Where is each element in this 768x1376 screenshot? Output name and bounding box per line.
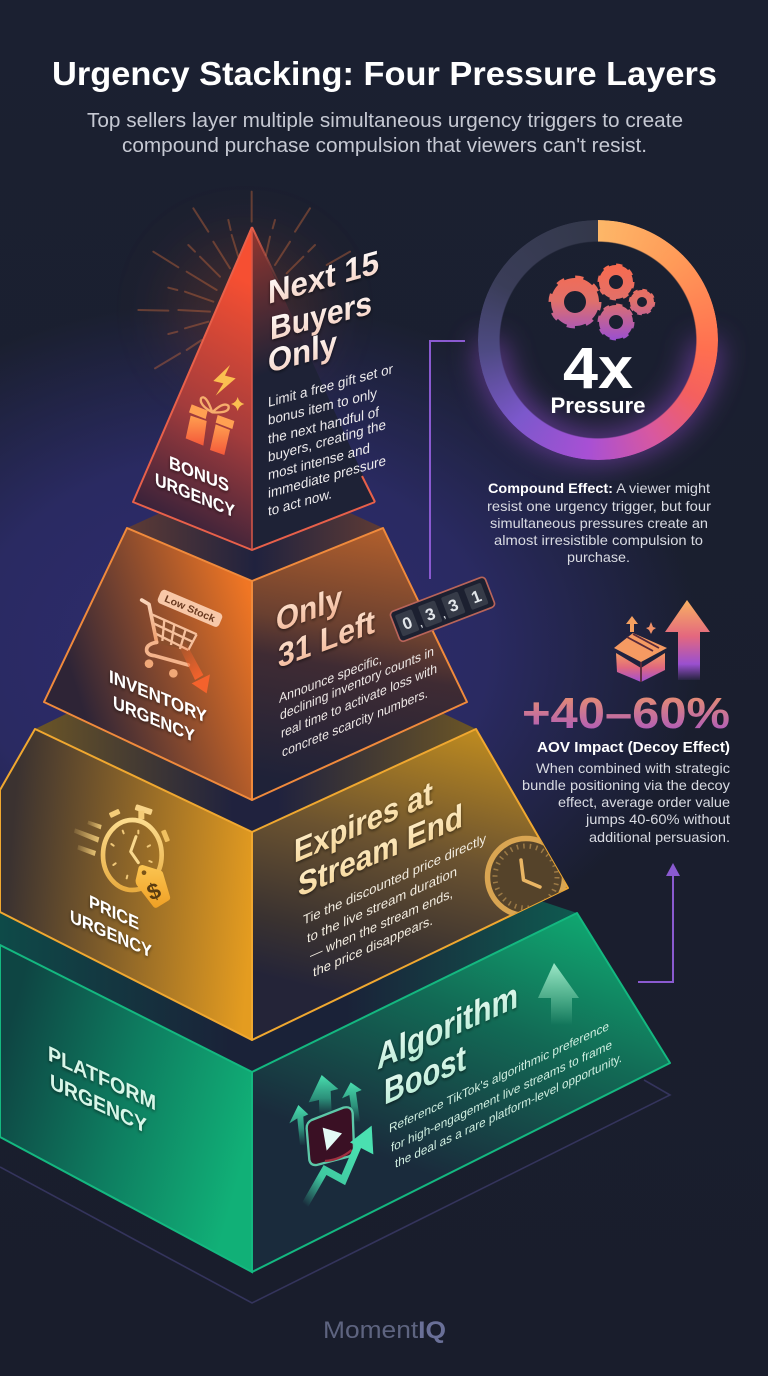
counter: 0,3,3,1 <box>389 576 496 642</box>
icon: stopwatch with price tag: $ <box>143 876 165 905</box>
right face: inventory <box>252 528 467 800</box>
body: only 31 left: concrete scarcity numbers. <box>282 685 428 760</box>
right face: platform <box>252 913 670 1272</box>
body: next 15 buyers only: the next handful of <box>268 404 379 448</box>
text block: compound effect: purchase. <box>567 549 630 565</box>
heading: next 15 buyers only: Buyers <box>270 285 372 348</box>
icon: clock on price layer <box>488 838 564 916</box>
text block: aov impact: additional persuasion. <box>589 829 730 845</box>
icon: box with up arrow <box>614 600 710 682</box>
heading: expires at stream end: Stream End <box>298 797 463 905</box>
subtitle: compound purchase compulsion that viewers can't resist. <box>122 135 647 157</box>
text block: compound effect: resist one urgency trigger, but four <box>487 498 711 514</box>
text block: aov impact: effect, average order value <box>558 794 730 810</box>
counter: 0,3,3,1: 0 <box>400 613 415 634</box>
right face: price <box>252 729 568 1040</box>
footer logo: Moment IQ <box>323 1317 446 1344</box>
panel: platform urgency layer <box>0 900 670 1272</box>
connector: pressure ring to inventory layer <box>430 341 465 579</box>
left face: price <box>0 729 252 1040</box>
text block: compound effect <box>487 480 711 565</box>
body: only 31 left <box>279 643 437 760</box>
body: next 15 buyers only <box>268 361 393 520</box>
heading: next 15 buyers only: Only <box>268 325 337 381</box>
heading: algorithm boost <box>377 975 518 1113</box>
icon: shopping cart with low stock tag <box>142 589 224 693</box>
label: price urgency: PRICE <box>89 892 139 935</box>
body: algorithm boost: Reference TikTok's algorithmic preference <box>389 1018 609 1136</box>
label: platform urgency: PLATFORM <box>48 1041 156 1116</box>
body: expires at stream end: — when the stream ends, <box>310 885 453 963</box>
counter: 0,3,3,1: 3 <box>446 595 461 616</box>
heading: next 15 buyers only <box>268 244 379 381</box>
body: only 31 left: real time to activate loss with <box>281 660 437 741</box>
left face: inventory <box>44 528 252 800</box>
stat label: pressure: Pressure <box>550 393 646 418</box>
left face: bonus <box>133 227 252 550</box>
body: next 15 buyers only: bonus item to only <box>268 386 378 429</box>
subtitle <box>87 110 683 157</box>
counter: 0,3,3,1: , <box>441 610 447 621</box>
left face: platform <box>0 945 252 1272</box>
body: expires at stream end <box>303 831 487 980</box>
body: next 15 buyers only: most intense and <box>268 441 370 484</box>
panel: price urgency layer <box>0 712 568 1040</box>
icon: gift with lightning <box>186 365 244 455</box>
icon: stopwatch with price tag <box>74 804 170 908</box>
stat: 4x: 4x <box>563 336 633 401</box>
stat: +40–60%: +40–60% <box>522 689 730 738</box>
body: expires at stream end: to the live stream duration <box>307 864 457 947</box>
heading: algorithm boost: Boost <box>384 1036 466 1113</box>
base shadow outline <box>0 1080 670 1303</box>
body: next 15 buyers only: buyers, creating the <box>268 417 386 466</box>
label: platform urgency: URGENCY <box>50 1069 147 1138</box>
subtitle: Top sellers layer multiple simultaneous urgency triggers to create <box>87 110 683 132</box>
tag: low stock: Low Stock <box>163 594 217 625</box>
heading: aov impact: AOV Impact (Decoy Effect) <box>537 739 730 756</box>
panel: bonus urgency layer <box>133 227 393 550</box>
body: only 31 left: Announce specific, <box>279 650 382 706</box>
body: next 15 buyers only: to act now. <box>268 486 332 520</box>
label: bonus urgency <box>155 452 235 522</box>
heading: algorithm boost: Algorithm <box>377 975 518 1079</box>
title: Urgency Stacking: Four Pressure Layers <box>52 55 717 92</box>
body: algorithm boost: for high-engagement live streams to frame <box>391 1037 612 1155</box>
panel: inventory urgency layer <box>44 513 496 800</box>
icon: video play with rising arrows <box>289 1075 373 1205</box>
label: bonus urgency: BONUS <box>169 452 229 496</box>
decorative burst around apex <box>138 192 350 368</box>
connector arrow: platform layer to AOV <box>638 863 680 982</box>
label: inventory urgency: URGENCY <box>113 692 195 746</box>
pressure progress ring <box>478 220 718 460</box>
label: bonus urgency: URGENCY <box>155 469 235 522</box>
ring glow <box>490 340 706 448</box>
text block: compound effect: almost irresistible compulsion to <box>494 532 703 548</box>
text block: compound effect: simultaneous pressures create an <box>490 515 708 531</box>
text block: compound effect: Compound Effect: A viewer might <box>488 480 710 496</box>
text block: aov impact <box>522 760 730 845</box>
text block: aov impact: When combined with strategic <box>536 760 730 776</box>
heading: only 31 left: 31 Left <box>278 603 375 676</box>
counter: 0,3,3,1: 3 <box>423 604 438 625</box>
body: expires at stream end: the price disappears. <box>313 912 433 980</box>
icon: large up arrow <box>538 963 579 1025</box>
body: expires at stream end: Tie the discounted price directly <box>303 831 487 929</box>
body: algorithm boost: the deal as a rare platform-level opportunity. <box>395 1050 622 1171</box>
heading: next 15 buyers only: Next 15 <box>268 244 379 312</box>
body: next 15 buyers only: Limit a free gift set or <box>268 361 393 411</box>
icon: gears <box>551 266 654 338</box>
counter: 0,3,3,1: 1 <box>469 586 484 607</box>
text block: aov impact: bundle positioning via the decoy <box>522 777 730 793</box>
body: only 31 left: declining inventory counts in <box>280 643 434 723</box>
body: next 15 buyers only: immediate pressure <box>268 453 386 502</box>
heading: only 31 left: Only <box>276 579 342 640</box>
right face: bonus <box>252 227 375 550</box>
text block: aov impact: jumps 40-60% without <box>585 811 730 827</box>
heading: expires at stream end: Expires at <box>294 774 433 871</box>
counter: 0,3,3,1: , <box>418 618 424 630</box>
label: inventory urgency: INVENTORY <box>109 666 207 727</box>
label: price urgency: URGENCY <box>70 906 152 962</box>
